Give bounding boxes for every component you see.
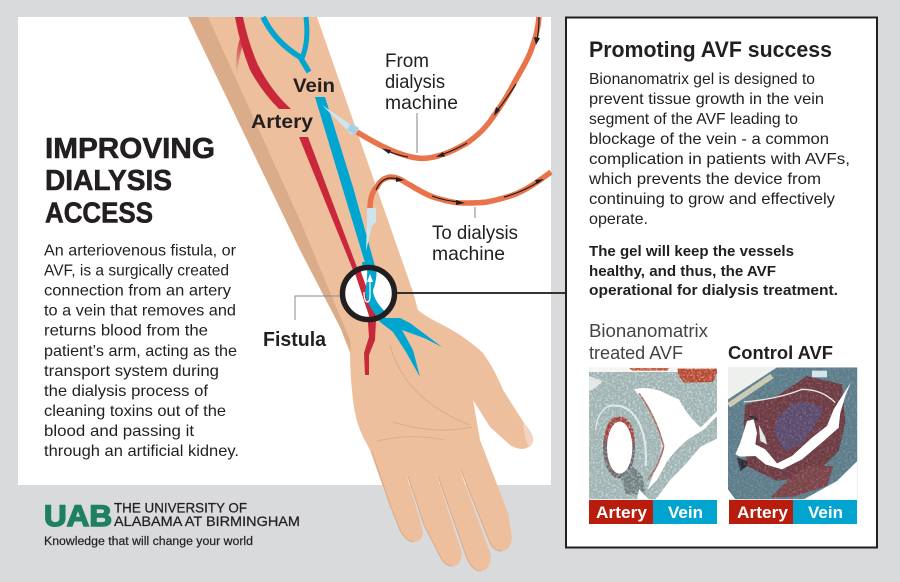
panel: promoting AVF success <box>566 18 877 548</box>
intro text block: through an artificial kidney. <box>44 443 239 460</box>
panel body text: continuing to grow and effectively <box>589 191 835 208</box>
intro text block: AVF, is a surgically created <box>44 262 229 280</box>
logo: UAB: UAB <box>44 500 112 533</box>
palm creases <box>377 345 472 441</box>
panel body text: complication in patients with AVFs, <box>589 151 850 168</box>
panel body text <box>588 71 850 228</box>
intro text block: An arteriovenous fistula, or <box>44 242 237 260</box>
tag bar: treated AVF: Artery <box>596 503 648 522</box>
needle: from machine <box>322 105 359 135</box>
tube: to dialysis machine <box>370 172 551 208</box>
heading: improving dialysis access <box>45 133 215 230</box>
intro text block: blood and passing it <box>44 423 195 440</box>
panel: illustration and intro <box>18 17 551 485</box>
heading: improving dialysis access: IMPROVING <box>45 133 215 165</box>
label: from dialysis machine: From <box>385 50 429 72</box>
micrograph: treated AVF <box>589 367 717 499</box>
tag bar: control AVF: Vein <box>808 503 843 522</box>
label: to dialysis machine: To dialysis <box>432 222 518 244</box>
intro text block: the dialysis process of <box>44 383 209 400</box>
label: from dialysis machine <box>385 50 458 114</box>
caption: treated AVF <box>589 320 709 363</box>
micrograph: control AVF <box>728 367 857 499</box>
artery <box>235 17 376 375</box>
logo: UAB: THE UNIVERSITY OF <box>114 500 247 516</box>
label: from dialysis machine: dialysis <box>385 71 445 93</box>
intro text block: cleaning toxins out of the <box>44 403 226 420</box>
panel body text: Bionanomatrix gel is designed to <box>589 71 815 88</box>
connector line to panel <box>396 292 566 294</box>
panel body text: prevent tissue growth in the vein <box>589 91 824 108</box>
label: to dialysis machine: machine <box>432 243 505 265</box>
panel body text: blockage of the vein - a common <box>589 131 829 148</box>
panel body text: segment of the AVF leading to <box>589 111 798 128</box>
illustration: arm and hand <box>188 17 533 571</box>
panel bold statement: healthy, and thus, the AVF <box>589 263 776 280</box>
finger shading <box>372 452 502 571</box>
tag bar: control AVF: Artery <box>737 503 789 522</box>
tag bar: control AVF <box>729 500 857 524</box>
panel body text: which prevents the device from <box>588 171 821 188</box>
panel heading: Promoting AVF success <box>589 37 832 62</box>
intro text block: transport system during <box>44 363 219 380</box>
heading: improving dialysis access: DIALYSIS <box>45 165 172 197</box>
logo: UAB <box>44 500 300 548</box>
logo: UAB: ALABAMA AT BIRMINGHAM <box>114 513 300 529</box>
label: from dialysis machine: machine <box>385 92 458 114</box>
fistula magnifier <box>342 255 394 324</box>
heading: improving dialysis access: ACCESS <box>45 198 153 230</box>
label: vein: Vein <box>293 75 335 97</box>
tag bar: treated AVF <box>589 500 717 524</box>
vein <box>263 17 442 377</box>
intro text block: returns blood from the <box>44 322 208 340</box>
fistula callout leader <box>295 296 342 320</box>
intro text block: to a vein that removes and <box>44 302 236 320</box>
intro text block: patient’s arm, acting as the <box>44 343 237 360</box>
needle: to machine <box>366 208 376 251</box>
panel bold statement: The gel will keep the vessels <box>589 243 794 260</box>
label: artery: Artery <box>251 111 313 133</box>
vessel labels <box>251 75 335 133</box>
intro text block: connection from an artery <box>44 282 231 300</box>
caption: control AVF: Control AVF <box>728 342 833 363</box>
tube: from dialysis machine <box>357 17 540 158</box>
thumb nail <box>523 423 533 446</box>
label: to dialysis machine <box>432 222 518 265</box>
label: fistula: Fistula <box>263 329 327 351</box>
intro text block <box>44 242 239 460</box>
logo: UAB: Knowledge that will change your world <box>44 536 253 548</box>
caption: treated AVF: Bionanomatrix <box>589 320 709 341</box>
arm shadow <box>188 17 351 353</box>
caption: treated AVF: treated AVF <box>589 342 683 363</box>
panel bold statement: operational for dialysis treatment. <box>589 282 838 299</box>
panel bold statement <box>589 243 838 299</box>
tag bar: treated AVF: Vein <box>668 503 703 522</box>
panel body text: operate. <box>589 211 648 228</box>
